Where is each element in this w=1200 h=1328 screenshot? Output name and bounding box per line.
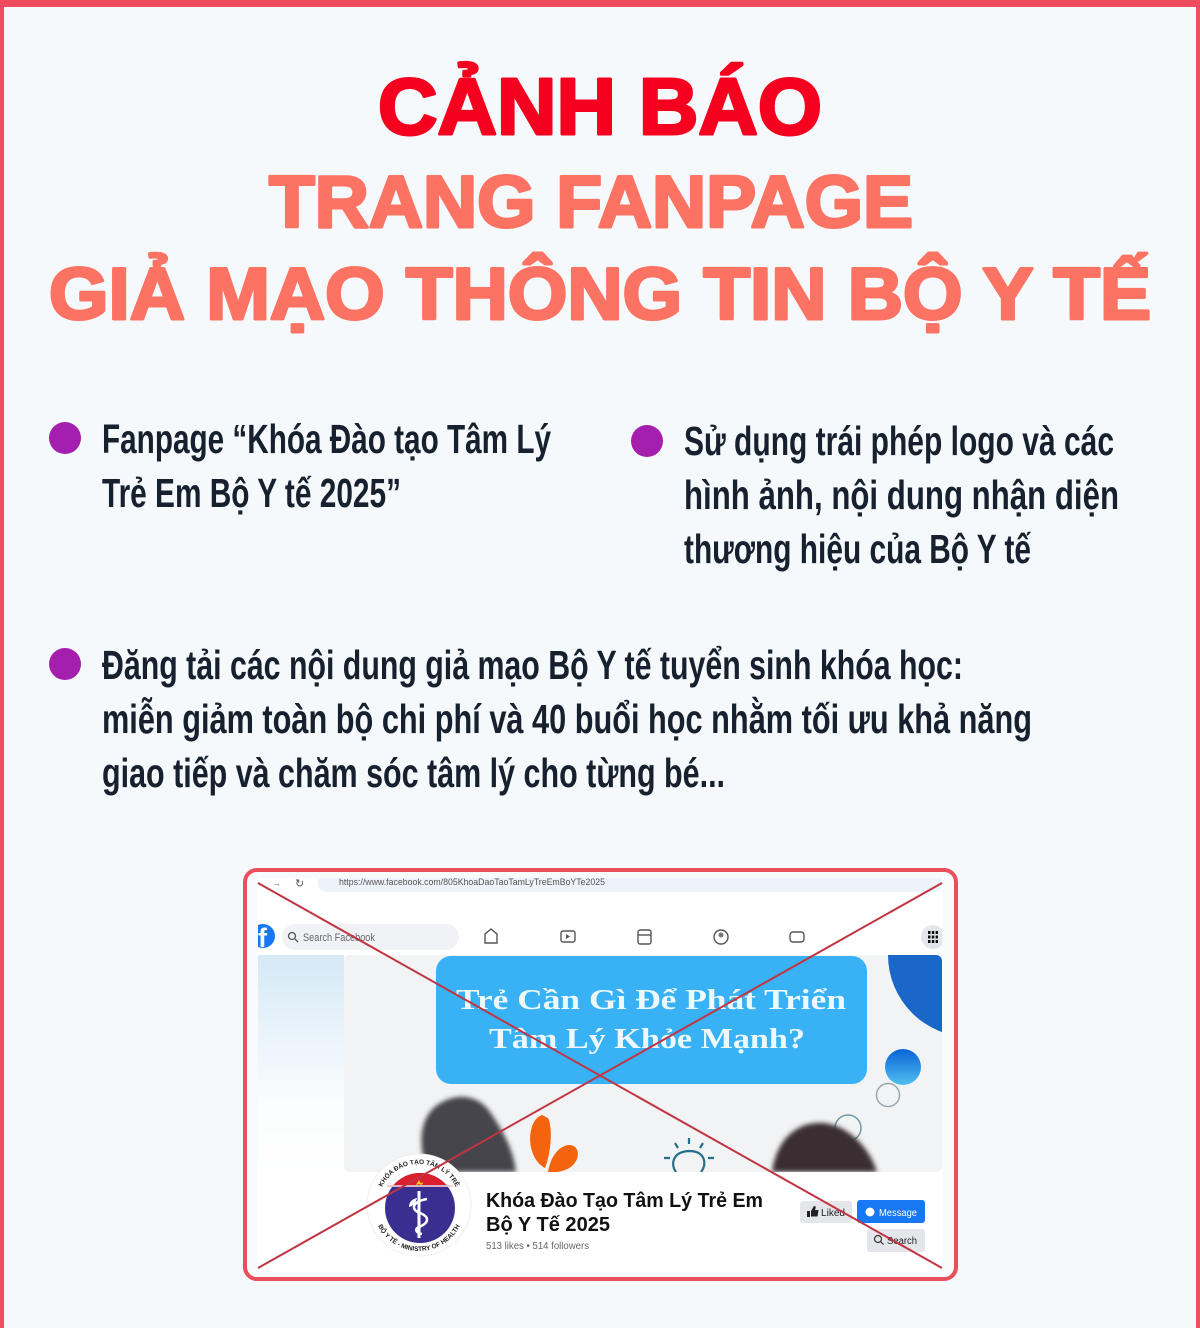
panel: fake fanpage screenshot [243, 868, 958, 1281]
red cross over the screenshot [258, 883, 942, 1268]
bullet: unauthorized logo use [631, 418, 1119, 572]
facebook navigation bar: f [258, 923, 268, 953]
browser address bar: → [272, 878, 281, 888]
bullet: fake course content [49, 642, 1032, 796]
orange heart [530, 1115, 551, 1168]
bullet: fake course content: giao tiếp và chăm sóc tâm lý cho từng bé... [102, 750, 725, 796]
browser address bar: ↻ [295, 878, 304, 890]
title: GIẢ MẠO THÔNG TIN BỘ Y TẾ [49, 254, 1151, 335]
page action buttons: Search [887, 1236, 917, 1247]
page name and stats: Bộ Y Tế 2025 [486, 1214, 610, 1236]
title: CẢNH BÁO [378, 62, 822, 151]
browser address bar [274, 878, 942, 892]
cover image: Tâm Lý Khỏe Mạnh? [489, 1023, 805, 1055]
bulb icon [664, 1138, 714, 1172]
page name and stats [486, 1190, 763, 1252]
logo: Ministry of Health: BỘ Y TẾ - MINISTRY OF HEALTH [378, 1224, 460, 1251]
browser address bar: https://www.facebook.com/805KhoaDaoTaoTamLyTreEmBoYTe2025 [339, 877, 605, 888]
bullet: fanpage name [49, 416, 551, 516]
page name and stats: 513 likes • 514 followers [486, 1241, 589, 1252]
page action buttons: Liked [821, 1208, 845, 1219]
page name and stats: Khóa Đào Tạo Tâm Lý Trẻ Em [486, 1190, 763, 1212]
hair left child [421, 1097, 516, 1172]
bullet: unauthorized logo use: thương hiệu của Bộ Y tế [684, 526, 1031, 572]
title [49, 62, 1151, 335]
facebook navigation bar [258, 924, 942, 950]
bullet: fanpage name: Fanpage “Khóa Đào tạo Tâm Lý [102, 416, 551, 462]
cover image [258, 955, 942, 1172]
logo: Ministry of Health: KHÓA ĐÀO TẠO TÂM LÝ TRẺ [378, 1160, 460, 1187]
hair right child [772, 1123, 877, 1172]
title: TRANG FANPAGE [269, 162, 913, 243]
page action buttons [800, 1200, 925, 1252]
bullet: fanpage name: Trẻ Em Bộ Y tế 2025” [102, 470, 401, 516]
facebook navigation bar: Search Facebook [303, 932, 375, 944]
cover image: Trẻ Cần Gì Để Phát Triển [456, 984, 846, 1016]
logo: Ministry of Health [366, 1154, 472, 1256]
page action buttons: Message [879, 1208, 917, 1219]
